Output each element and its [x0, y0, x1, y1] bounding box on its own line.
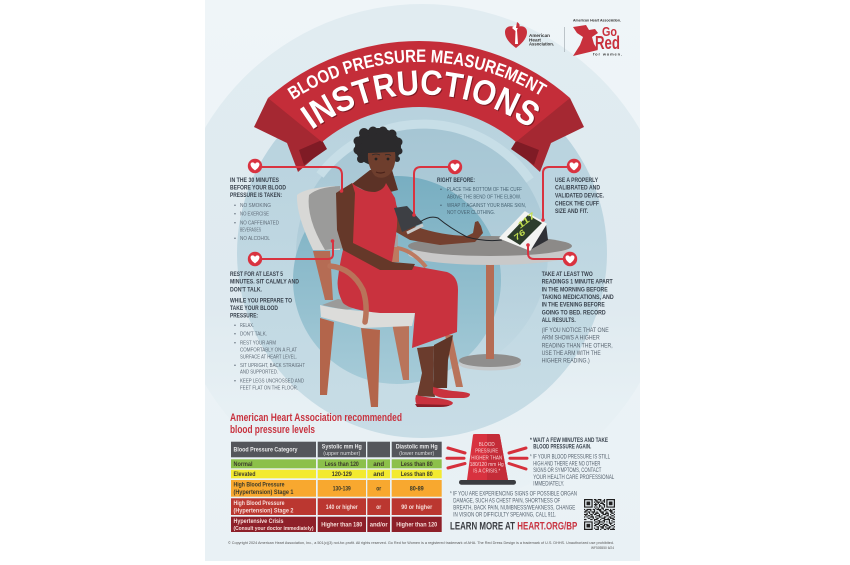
row: hypertensive crisis: Higher than 120: [396, 521, 438, 528]
row: normal: [231, 459, 442, 468]
text block: rest and prepare: DON'T TALK.: [240, 332, 267, 338]
text block: take two readings: ARM SHOWS A HIGHER: [542, 336, 600, 342]
banner heading large: INSTRUCTIONS: [300, 70, 540, 130]
row: stage 1: (Hypertension) Stage 1: [234, 489, 294, 496]
text block: 30 minutes before: •: [234, 203, 236, 209]
hair: [354, 126, 402, 166]
connector 5 with heart icon: [526, 243, 577, 266]
text block: 30 minutes before: BEVERAGES: [240, 227, 261, 233]
text block: rest and prepare: [230, 271, 305, 392]
text block: rest and prepare: PRESSURE:: [230, 313, 258, 320]
left arm and hand: [336, 183, 415, 270]
icon: crisis siren: PRESSURE: [475, 448, 499, 454]
text block: organ damage warning: BREATH, BACK PAIN, NUMBNESS/WEAKNESS, CHANGE: [453, 506, 575, 512]
text block: 30 minutes before: [230, 177, 286, 242]
text block: organ damage warning: * IF YOU ARE EXPERIENCING SIGNS OF POSSIBLE ORGAN: [450, 492, 577, 498]
text block: take two readings: READINGS 1 MINUTE APART: [542, 279, 613, 286]
text block: use a validated device: VALIDATED DEVICE.: [555, 192, 604, 199]
logo: Go Red for Women: [564, 18, 622, 56]
chair rear legs: [392, 323, 409, 380]
text block: rest and prepare: •: [234, 341, 236, 347]
text block: crisis instructions: [530, 437, 615, 488]
text block: crisis instructions: IMMEDIATELY.: [533, 482, 565, 488]
connector 2 with heart icon: [248, 239, 334, 266]
siren dome: [467, 434, 508, 480]
siren rays: [447, 448, 527, 469]
text block: use a validated device: USE A PROPERLY: [555, 177, 599, 184]
poster background with concentric circles: [205, 0, 640, 561]
text block: rest and prepare: •: [234, 323, 236, 329]
text block: organ damage warning: IN VISION OR DIFFICULTY SPEAKING, CALL 911.: [453, 513, 557, 519]
text block: crisis instructions: HIGH AND THERE ARE NO OTHER: [533, 461, 601, 467]
row: hypertensive crisis: Higher than 180: [321, 521, 363, 528]
text block: 30 minutes before: •: [234, 220, 236, 226]
blood pressure monitor: [500, 210, 548, 250]
illustration: table: [408, 236, 572, 370]
blood pressure monitor: 117: [516, 210, 537, 231]
text block: crisis instructions: * IF YOUR BLOOD PRESSURE IS STILL: [530, 455, 610, 461]
text block: right before: WRAP IT AGAINST YOUR BARE SKIN,: [447, 203, 526, 209]
text block: right before: ABOVE THE BEND OF THE ELBOW.: [447, 194, 521, 200]
facial features: [372, 154, 391, 173]
table header row: (lower number): [399, 451, 435, 457]
text block: rest and prepare: DON'T TALK.: [230, 286, 262, 293]
connector 1 with heart icon: [248, 159, 343, 193]
text block: 30 minutes before: PRESSURE IS TAKEN:: [230, 192, 282, 199]
blood pressure monitor: 76: [513, 227, 527, 243]
table header row: Diastolic mm Hg: [396, 443, 438, 450]
text block: use a validated device: CALIBRATED AND: [555, 185, 600, 192]
row: stage 1: or: [376, 486, 382, 493]
text block: rest and prepare: KEEP LEGS UNCROSSED AND: [240, 379, 304, 385]
text block: take two readings: TAKE AT LEAST TWO: [542, 271, 593, 278]
text block: right before: PLACE THE BOTTOM OF THE CUFF: [447, 187, 522, 193]
row: hypertensive crisis: and/or: [370, 521, 388, 528]
right arm and hand: [393, 198, 483, 245]
ribbon left tail: [254, 98, 323, 172]
text block: 30 minutes before: NO CAFFEINATED: [240, 220, 279, 226]
text block: crisis instructions: YOUR HEALTH CARE PROFESSIONAL: [533, 475, 615, 481]
text block: organ damage warning: [450, 492, 577, 519]
text block: rest and prepare: •: [234, 332, 236, 338]
icon: crisis siren: HIGHER THAN: [471, 455, 502, 461]
face: [368, 152, 395, 178]
red dress: [338, 183, 458, 348]
row: elevated: 120-129: [332, 471, 352, 478]
text block: take two readings: USE THE ARM WITH THE: [542, 351, 601, 357]
blood pressure cuff: [394, 206, 423, 232]
text block: take two readings: ALL RESULTS.: [542, 317, 576, 324]
text block: use a validated device: SIZE AND FIT.: [555, 208, 588, 215]
row: elevated: Less than 80: [401, 471, 433, 478]
text block: right before: [437, 177, 526, 216]
text block: 30 minutes before: IN THE 30 MINUTES: [230, 177, 279, 184]
chair back: [297, 186, 340, 250]
text block: 30 minutes before: NO EXERCISE: [240, 212, 269, 218]
text block: right before: •: [440, 203, 442, 209]
logo: Go Red for Women: for women.: [593, 52, 622, 56]
row: normal: Less than 120: [325, 461, 359, 468]
table header row: Systolic mm Hg: [322, 443, 362, 450]
text block: rest and prepare: REST YOUR ARM: [240, 341, 276, 347]
ribbon main band: [268, 41, 570, 142]
text block: 30 minutes before: BEFORE YOUR BLOOD: [230, 184, 286, 192]
text block: use a validated device: [555, 177, 604, 215]
text block: 30 minutes before: NO SMOKING: [240, 203, 271, 209]
connector 4 with heart icon: [541, 159, 581, 222]
ribbon right tail: [516, 98, 584, 172]
text block: rest and prepare: RELAX.: [240, 323, 254, 329]
chair armrest: [330, 266, 366, 322]
row: normal: and: [373, 461, 384, 468]
text block: take two readings: TAKING MEDICATIONS, AND: [542, 294, 614, 301]
text block: crisis instructions: BLOOD PRESSURE AGAIN.: [533, 443, 591, 450]
text block: take two readings: GOING TO BED. RECORD: [542, 309, 606, 316]
row: normal: Normal: [234, 461, 253, 468]
text block: rest and prepare: •: [234, 379, 236, 385]
table header row: (upper number): [323, 451, 361, 457]
row: stage 2: High Blood Pressure: [234, 500, 285, 507]
connector 3 with heart icon: [412, 160, 462, 217]
text block: rest and prepare: WHILE YOU PREPARE TO: [230, 297, 292, 304]
row: stage 1: High Blood Pressure: [234, 482, 285, 489]
banner heading small: BLOOD PRESSURE MEASUREMENT: [287, 50, 548, 100]
logo: American Heart Association: Association.: [529, 42, 554, 47]
icon: crisis siren: [447, 434, 527, 485]
row: stage 2: [231, 498, 442, 515]
text block: right before: NOT OVER CLOTHING.: [447, 210, 495, 216]
text block: right before: RIGHT BEFORE:: [437, 177, 475, 184]
text block: rest and prepare: COMFORTABLY ON A FLAT: [240, 347, 297, 353]
illustration: chair: [297, 186, 463, 407]
row: elevated: [231, 470, 442, 478]
logo: American Heart Association: American: [529, 33, 550, 38]
heading: recommended levels: blood pressure levels: [230, 424, 315, 436]
text block: 30 minutes before: •: [234, 212, 236, 218]
logo: Go Red for Women: Go: [602, 24, 617, 39]
logo: Go Red for Women: Red: [595, 33, 620, 53]
copyright footer: [228, 540, 615, 550]
table header row: [231, 442, 442, 457]
text block: organ damage warning: DAMAGE, SUCH AS CHEST PAIN, SHORTNESS OF: [453, 499, 561, 505]
text block: rest and prepare: MINUTES. SIT CALMLY AND: [230, 279, 299, 286]
logo: Go Red for Women: American Heart Association.: [573, 18, 621, 22]
row: elevated: Elevated: [234, 471, 256, 478]
text block: 30 minutes before: NO ALCOHOL: [240, 236, 270, 242]
text block: take two readings: IN THE MORNING BEFORE: [542, 286, 608, 293]
shoes: [433, 387, 470, 398]
row: stage 1: 130-139: [333, 486, 351, 493]
siren text: BLOOD: [479, 442, 495, 448]
text block: rest and prepare: REST FOR AT LEAST 5: [230, 271, 283, 278]
legs: [433, 335, 453, 388]
text block: rest and prepare: •: [234, 363, 236, 369]
heading: recommended levels: American Heart Association recommended: [230, 412, 402, 424]
text block: crisis instructions: * WAIT A FEW MINUTES AND TAKE: [530, 437, 608, 444]
copyright footer: WF505550 6/24: [591, 545, 615, 550]
copyright footer: © Copyright 2024 American Heart Association, Inc., a 501(c)(3) not-for-profit. All rights reserved. Go Red for Women is a registered trademark of AHA. The Red Dress Design is a trademark of U.S. DHHS. Unauthorized use prohibited.: [228, 540, 614, 545]
heading: recommended levels: [230, 412, 402, 436]
row: elevated: and: [373, 471, 384, 478]
row: stage 2: 140 or higher: [326, 504, 358, 511]
text block: take two readings: IN THE EVENING BEFORE: [542, 302, 605, 309]
row: normal: Less than 80: [401, 461, 433, 468]
text block: rest and prepare: SIT UPRIGHT, BACK STRAIGHT: [240, 363, 305, 369]
row: stage 1: [231, 480, 442, 497]
text block: take two readings: (IF YOU NOTICE THAT ONE: [542, 328, 609, 334]
row: hypertensive crisis: (Consult your doctor immediately): [234, 526, 314, 532]
table header row: Blood Pressure Category: [234, 447, 298, 454]
icon: crisis siren: IS A CRISIS.*: [473, 469, 500, 475]
neck: [352, 170, 398, 196]
blood pressure table: [231, 442, 442, 532]
row: stage 1: 80-89: [410, 486, 424, 493]
row: hypertensive crisis: [231, 517, 442, 532]
text block: 30 minutes before: •: [234, 236, 236, 242]
chair seat: [322, 299, 370, 310]
text block: rest and prepare: SURFACE AT HEART LEVEL.: [240, 354, 297, 360]
text block: crisis instructions: SIGNS OR SYMPTOMS, CONTACT: [533, 468, 602, 474]
logo: American Heart Association: [505, 22, 554, 48]
learn more link text: HEART.ORG/BP: [517, 520, 577, 532]
cuff tube: [420, 217, 502, 241]
chair far side: [388, 235, 398, 248]
title banner ribbon: [254, 41, 584, 172]
logo: American Heart Association: Heart: [529, 37, 542, 42]
text block: right before: •: [440, 187, 442, 193]
row: hypertensive crisis: Hypertensive Crisis: [234, 518, 284, 525]
text block: take two readings: [542, 271, 614, 365]
row: stage 2: or: [376, 504, 382, 511]
row: stage 2: 90 or higher: [401, 504, 433, 511]
icon: crisis siren: 180/120 mm Hg: [470, 462, 504, 468]
row: stage 2: (Hypertension) Stage 2: [234, 508, 294, 514]
text block: take two readings: HIGHER READING.): [542, 359, 590, 365]
learn more link text: LEARN MORE AT: [450, 520, 515, 532]
chair rear post: [313, 251, 333, 300]
text block: rest and prepare: AND SUPPORTED.: [240, 370, 278, 376]
illustration: woman: [330, 126, 502, 407]
QR code: [584, 500, 615, 529]
text block: use a validated device: CHECK THE CUFF: [555, 200, 599, 207]
text block: rest and prepare: FEET FLAT ON THE FLOOR.: [240, 386, 298, 392]
chair front legs: [320, 318, 334, 395]
text block: rest and prepare: TAKE YOUR BLOOD: [230, 305, 278, 312]
text block: take two readings: READING THAN THE OTHER,: [542, 343, 613, 349]
